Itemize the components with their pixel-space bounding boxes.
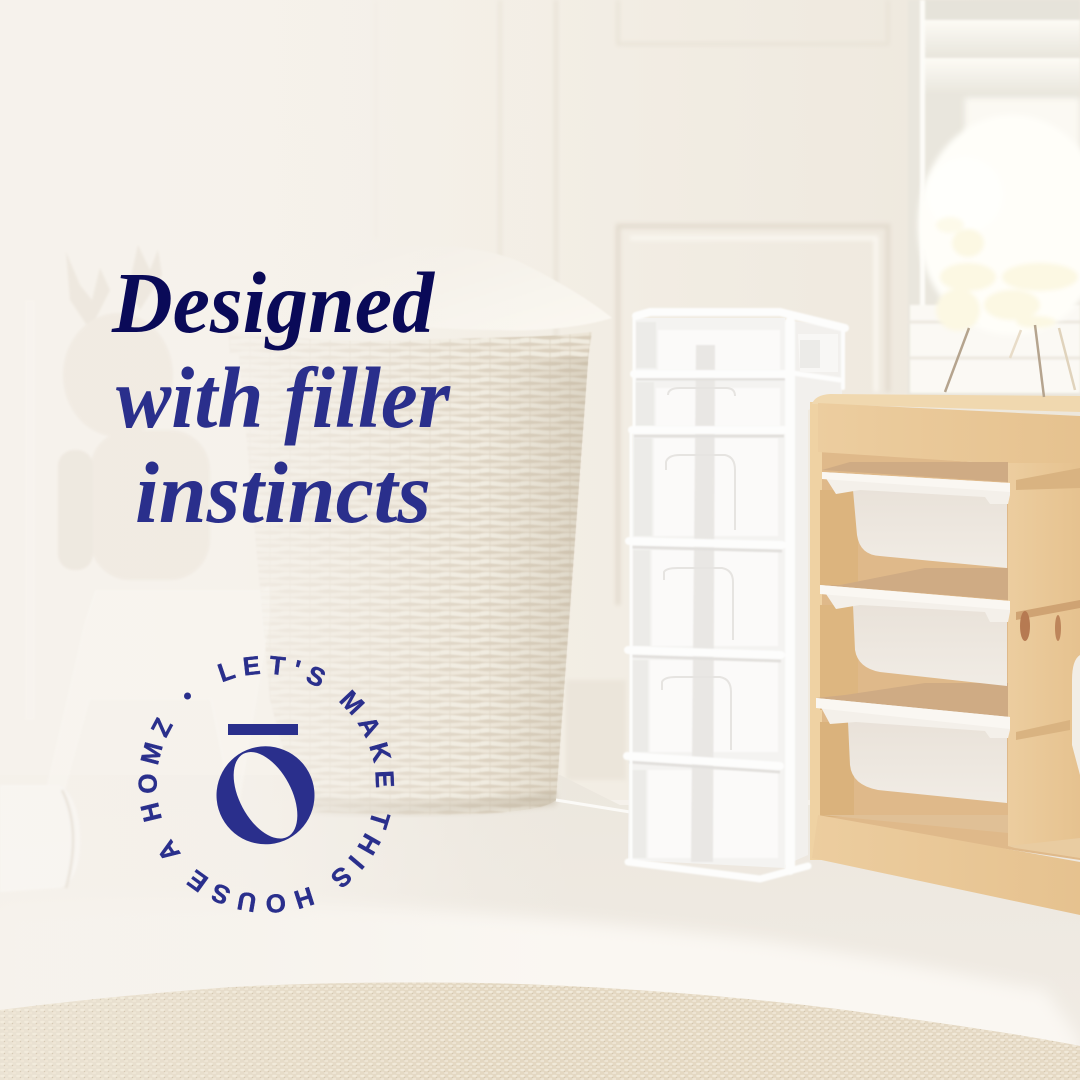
background: wall [0,0,1080,800]
bin 2 [820,585,1010,686]
lamp [918,115,1080,397]
tower centre column [691,345,715,862]
shelf bottom surface [822,815,1008,833]
shelf right post [1008,463,1080,858]
pillow [345,246,612,330]
cable on floor [556,800,630,812]
laundry basket [228,332,592,815]
floor sunlight [0,902,1080,1080]
bin 3 [816,698,1010,803]
shelf bottom board [812,815,1080,915]
tower rim shadows [629,379,786,772]
tower translucent panels [648,330,780,858]
tower side panel [785,320,845,865]
rug [0,982,1080,1080]
badge dot [184,692,191,700]
shelf back and interior [812,450,1080,860]
window with blinds [908,0,1080,395]
bin 1 [822,472,1010,568]
wall panel mouldings [376,0,888,780]
logo badge [138,656,394,913]
headline line 2: with filler [116,349,451,446]
lamp petals [936,217,1078,331]
headline line 3: instincts [135,444,431,541]
basket edge at right [1072,655,1080,775]
tower drawer handles [662,388,735,750]
logo ring [199,729,332,862]
floor [0,775,1080,1080]
drawer tower [627,312,845,879]
faded left overlay [0,0,640,1080]
shelf interior undersides [822,462,1008,482]
circular slogan: LET'S MAKE THIS HOUSE A HOMZ [138,656,394,913]
wooden shelf unit [810,394,1080,915]
headline [111,254,451,541]
shelf top surface [812,394,1080,412]
shelf left post [810,402,822,860]
tower rims [627,312,845,879]
shelf top board [818,403,1080,469]
headline line 1: Designed [111,254,435,351]
logo bar [228,724,298,735]
tower front body [628,318,785,868]
faded toys in background [0,245,270,892]
